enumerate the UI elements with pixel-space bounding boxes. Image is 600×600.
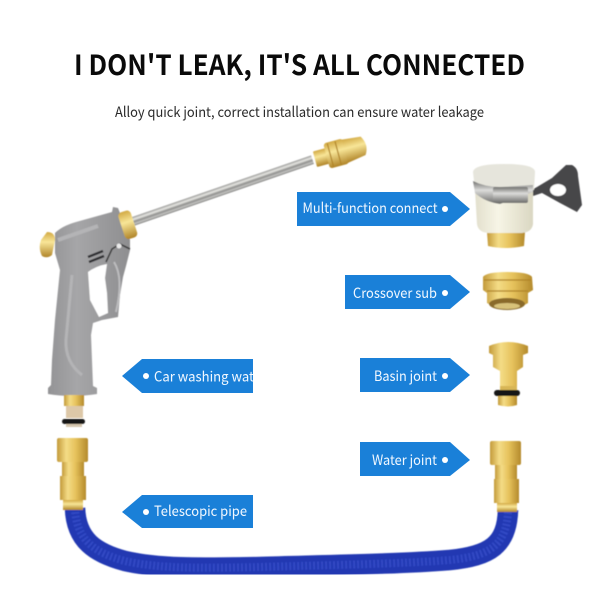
callout: basin joint: Basin joint bbox=[374, 366, 438, 386]
callout: telescopic pipe bbox=[122, 495, 253, 528]
icon: crossover sub bbox=[483, 272, 533, 310]
steel clamp bbox=[473, 181, 533, 204]
callout: water joint bbox=[360, 442, 470, 476]
callout: crossover sub: Crossover sub bbox=[353, 283, 437, 303]
right brass fitting bbox=[490, 441, 521, 512]
callout: crossover sub bbox=[345, 275, 470, 309]
callout: basin joint bbox=[360, 358, 470, 392]
trigger highlight bbox=[116, 244, 122, 248]
icon: basin joint bbox=[489, 342, 528, 406]
cap bbox=[473, 164, 535, 190]
white body bbox=[475, 190, 533, 233]
metal key bbox=[528, 165, 582, 212]
gun body and grip bbox=[48, 207, 130, 396]
trigger guard opening bbox=[88, 264, 108, 317]
icon: spray gun bbox=[40, 207, 138, 427]
steel wand bbox=[131, 155, 314, 226]
brass nozzle bbox=[312, 133, 370, 172]
left brass fitting bbox=[57, 438, 88, 510]
brass thread bbox=[487, 232, 525, 248]
callout: multi-function connect: Multi-function connect bbox=[302, 198, 438, 218]
icon: multi-function connector bbox=[473, 164, 582, 248]
callout: car washing water: Car washing wat bbox=[154, 366, 255, 386]
callout: telescopic pipe: Telescopic pipe bbox=[154, 501, 247, 521]
quick connector below the gun bbox=[64, 395, 84, 406]
icon: spray wand with brass nozzle bbox=[131, 133, 370, 226]
icon: telescopic blue hose bbox=[57, 438, 521, 568]
subtitle: Alloy quick joint, correct installation can ensure water leakage bbox=[115, 102, 484, 122]
title: I DON'T LEAK, IT'S ALL CONNECTED bbox=[74, 44, 525, 84]
callout: water joint: Water joint bbox=[372, 450, 438, 470]
front brass collar bbox=[117, 209, 138, 240]
callout: multi-function connect bbox=[297, 192, 470, 226]
callout: car washing water bbox=[122, 359, 255, 393]
body shading bbox=[66, 275, 82, 375]
trigger slots bbox=[88, 251, 104, 262]
rear brass cap bbox=[40, 232, 55, 257]
